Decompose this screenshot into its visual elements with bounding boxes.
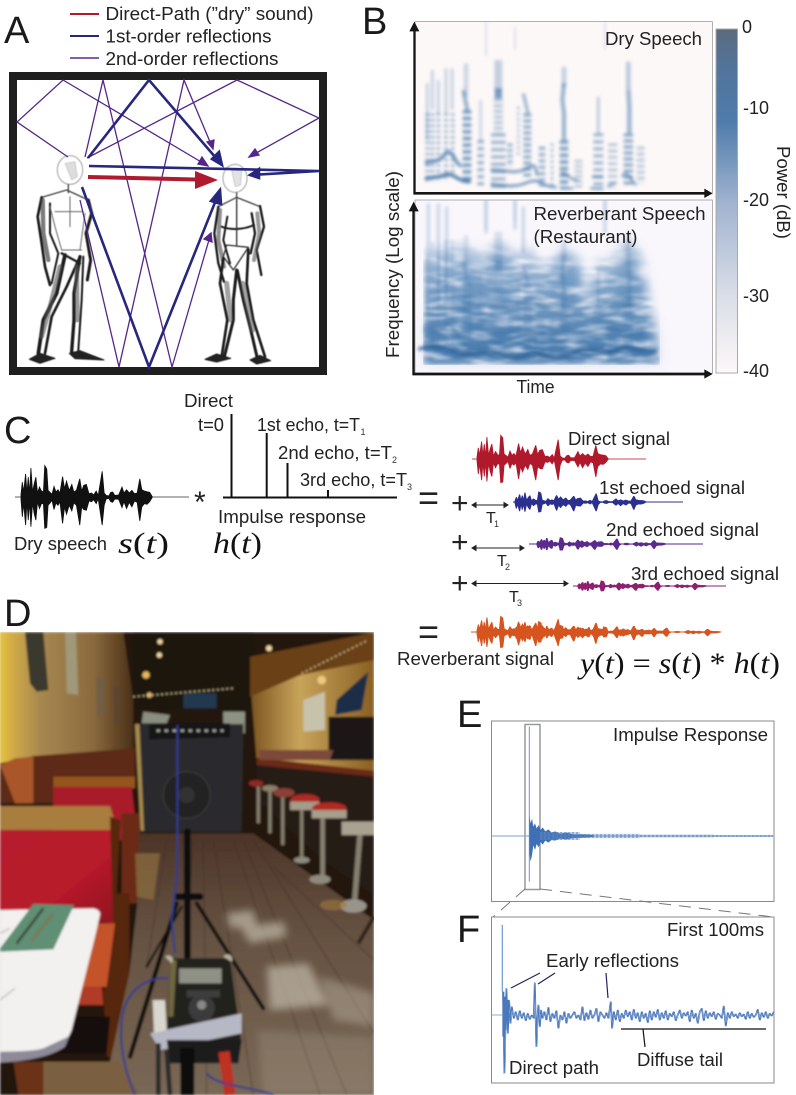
label: dry speech s(t): Dry speech [14,534,107,554]
panel B: spectrograms [362,1,793,397]
annotation: early reflections [511,951,679,998]
annotation: diffuse tail [621,1029,766,1070]
colorbar label: power: Power (dB) [773,146,793,239]
legend: path types: 2nd-order reflections [106,49,278,69]
label: direct signal: Direct signal [568,429,670,449]
panel letter E: E [457,694,482,736]
speaker [135,723,243,832]
label: h(t): h(t) [213,527,262,560]
waveform: direct signal [472,435,646,483]
label: dry speech s(t): s(t) [118,527,169,560]
impulse labels: 3rd echo, t=T [300,470,407,490]
panel letter C: C [4,410,31,452]
panel E: impulse response plot [457,694,774,917]
label: first 100ms: First 100ms [667,920,764,940]
impulse labels: Impulse response [218,507,366,527]
dashed zoom lines [493,889,773,917]
legend: path types: 1st-order reflections [106,26,272,46]
left wall [0,632,133,763]
label: reverberant speech: Reverberant Speech [534,204,706,224]
impulse labels: 1 [360,427,366,437]
label: reverberant signal: Reverberant signal [397,649,554,669]
panel letter D: D [4,593,31,635]
axes: reverberant spectrogram [409,202,713,379]
colorbar: -20 [743,190,769,210]
row: second echo: 2nd echoed signal [606,520,759,540]
waveform: reverberant signal [471,616,721,648]
impulse labels [184,391,412,527]
row: second echo [451,520,759,572]
far window and lights [133,639,368,733]
row: third echo: 3rd echoed signal [631,564,779,584]
impulse waveform [492,727,773,882]
tripod [130,832,263,1057]
arrows: 2nd-order reflections [17,80,319,367]
row: third echo [451,564,779,608]
figure: listener [205,164,271,364]
legend: path types [70,4,314,69]
axis label: frequency: Frequency (Log scale) [383,171,403,358]
equation: y(t) = s(t) * h(t) [577,647,780,680]
equals sign: = [418,611,439,652]
recorder [150,954,242,1095]
left booths [0,748,140,1057]
convolution symbol: * [194,486,206,519]
arrows: 1st-order reflections [82,80,319,367]
colorbar: 0 [742,17,752,37]
room frame [13,76,323,371]
row: first echo [451,478,745,529]
impulse labels: 2 [392,455,397,465]
label: reverberant speech [534,204,706,247]
row: third echo: T [509,589,519,606]
row: first echo: 1st echoed signal [599,478,745,498]
right wall [250,659,374,772]
colorbar: -10 [743,98,769,118]
annotation: early reflections: Early reflections [546,951,679,971]
panel letter A: A [4,10,30,52]
panel C: convolution diagram [4,391,780,680]
impulse labels: 1st echo, t=T [257,415,360,435]
equals sign: = [418,477,439,518]
figure: speaker [29,156,104,363]
arrow: direct path [88,171,218,189]
plot frame [492,917,774,1083]
impulse labels: 3 [407,482,412,492]
colorbar: -40 [743,361,769,381]
wall pictures [25,632,118,725]
colorbar [716,17,769,381]
annotation: diffuse tail: Diffuse tail [637,1050,723,1070]
bar counter and stools [249,750,374,943]
label: dry speech: Dry Speech [605,29,702,49]
impulse labels: Direct [184,391,233,411]
row: first echo: + [451,487,469,520]
table [0,904,100,1063]
ceiling and background [0,632,374,1095]
early waveform [492,925,774,1073]
row: second echo: 2 [505,562,510,572]
wooden floor [108,832,374,1095]
row: second echo: + [451,526,469,559]
row: third echo: + [451,567,469,600]
annotation: direct path: Direct path [509,1058,599,1078]
impulse labels: t=0 [198,415,224,435]
plot frame [492,721,774,902]
row: second echo: T [497,553,507,570]
spectrogram: reverberant speech [415,193,712,373]
zoom window [525,724,540,890]
blue cables [121,725,273,1095]
impulse labels: 2nd echo, t=T [278,443,392,463]
waveform: dry speech [15,466,189,528]
label: reverberant speech: (Restaurant) [534,227,638,247]
row: third echo: 3 [517,598,522,608]
axis label: time: Time [516,377,554,397]
axes: dry spectrogram [409,22,713,198]
panel letter B: B [362,1,387,43]
colorbar: -30 [743,286,769,306]
panel A: room reflections diagram [4,4,323,371]
row: first echo: 1 [494,519,499,529]
row: first echo: T [486,510,496,527]
label: dry speech s(t) [14,527,169,560]
panel F: first 100ms plot [457,909,774,1083]
impulse response diagram [223,414,397,498]
panel D: restaurant photo [0,632,374,1095]
legend: path types: Direct-Path (”dry” sound) [106,4,314,24]
spectrogram: dry speech [415,22,712,193]
label: impulse response: Impulse Response [613,725,768,745]
panel letter F: F [457,909,480,951]
